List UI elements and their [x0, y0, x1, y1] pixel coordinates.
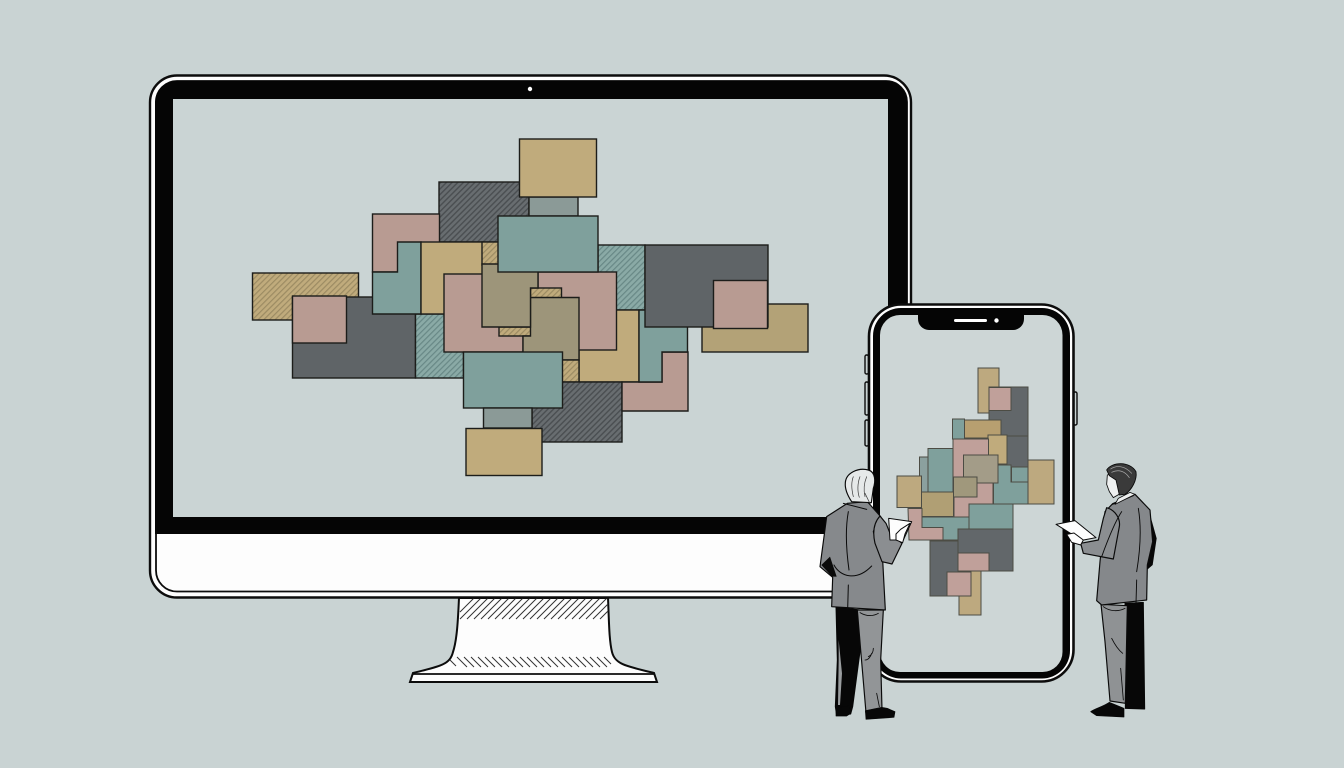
- block: hatched tan left: [252, 273, 358, 320]
- phone block: teal left: [928, 448, 953, 492]
- phone block: teal right small: [1012, 467, 1028, 482]
- right person hair highlights: [1111, 467, 1132, 478]
- left person sleeve: [874, 516, 902, 564]
- phone block: grey left sliver: [920, 457, 930, 492]
- smartphone: [865, 304, 1077, 682]
- phone block: tan top: [978, 368, 999, 413]
- block: hatched tan sliver lower: [499, 327, 531, 336]
- right person jacket seams: [1102, 496, 1140, 603]
- block: hatched dark top: [439, 182, 529, 242]
- phone block: dark top: [989, 387, 1028, 437]
- block: teal L left: [372, 242, 421, 314]
- phone block: teal small: [952, 419, 964, 439]
- camera dot: [528, 87, 532, 91]
- block: hatched tan lower: [562, 360, 579, 382]
- person right, in profile, holding a document: [1056, 464, 1157, 717]
- desktop block diagram: [252, 139, 808, 476]
- left person grey leg: [857, 610, 883, 713]
- block: teal top: [498, 216, 598, 272]
- right person hair: [1107, 464, 1136, 495]
- phone block: teal right L: [994, 465, 1028, 504]
- phone block: dark lower: [958, 529, 1013, 571]
- right person document: [1056, 521, 1096, 540]
- phone block diagram: [897, 368, 1054, 615]
- block: teal L right: [639, 310, 688, 382]
- left person dark leg: [835, 607, 861, 715]
- right person trouser creases: [1103, 607, 1125, 700]
- left person hand: [896, 523, 910, 543]
- right person back shadow: [1145, 508, 1157, 572]
- block: tan far right: [702, 304, 808, 352]
- monitor bezel: [155, 81, 907, 534]
- block: hatched tan small: [482, 242, 499, 265]
- right person grey leg: [1101, 604, 1127, 703]
- monitor stand: [410, 598, 657, 682]
- phone block: pink centre: [953, 439, 988, 478]
- block: hatched tan sliver upper: [530, 288, 562, 298]
- phone block: tan bottom: [959, 571, 981, 615]
- phone block: olive centre: [964, 455, 998, 483]
- block: pink L lower right: [622, 352, 688, 411]
- person left, seen from behind, holding a tablet: [820, 469, 912, 719]
- phone block: dark second: [1007, 436, 1028, 467]
- phone block: orange tan: [964, 420, 1001, 438]
- phone block: tan left second: [922, 492, 954, 516]
- desktop monitor: [150, 76, 911, 598]
- block: tan bottom: [466, 428, 542, 476]
- block: tan centre right: [579, 310, 639, 382]
- left person jacket: [820, 502, 885, 610]
- left person trouser creases: [860, 613, 879, 707]
- block: pink upper left: [372, 214, 440, 272]
- phone screen: [880, 315, 1062, 672]
- block: pink centre right: [538, 272, 616, 350]
- block: pink left: [292, 296, 346, 343]
- left person hair: [845, 469, 875, 503]
- block: olive first: [482, 264, 538, 327]
- phone speaker: [954, 319, 987, 322]
- right person hand: [1067, 533, 1083, 545]
- right person shoe: [1091, 702, 1124, 717]
- phone block: pink lower centre: [954, 483, 993, 517]
- left person leg highlight: [838, 640, 842, 705]
- monitor outer casing: [150, 76, 911, 598]
- block: dark slate right: [645, 245, 768, 327]
- block: pink right: [714, 280, 768, 328]
- phone block: pink lower left: [908, 508, 943, 540]
- phone camera: [994, 318, 999, 323]
- phone block: tan right: [1028, 460, 1054, 504]
- phone notch: [918, 314, 1024, 330]
- block: grey connector top: [529, 197, 578, 216]
- block: hatched teal centre: [598, 245, 645, 310]
- phone bezel: [873, 308, 1070, 678]
- phone block: pink bottom: [947, 572, 971, 596]
- block: tan top: [520, 139, 596, 197]
- phone block: tan left: [897, 476, 922, 508]
- left person jacket seams: [834, 503, 872, 609]
- left person tablet: [889, 518, 912, 540]
- left person shoes: [836, 706, 895, 719]
- monitor screen: [173, 99, 888, 517]
- block: teal centre: [464, 352, 562, 408]
- block: olive second: [523, 298, 579, 360]
- right person sleeve: [1081, 508, 1120, 559]
- block: tan centre left: [421, 242, 483, 314]
- phone block: pink top: [989, 388, 1011, 410]
- right person face: [1107, 472, 1121, 498]
- block: hatched teal left: [416, 314, 464, 378]
- right person collar: [1115, 492, 1135, 504]
- block: hatched dark lower: [532, 382, 622, 442]
- block: pink centre left: [444, 274, 523, 352]
- phone block: pink lower: [958, 553, 989, 571]
- phone block: dark lower left: [930, 541, 958, 596]
- block: dark slate left: [292, 297, 416, 378]
- phone block: olive small: [954, 477, 977, 497]
- phone block: teal lower left: [922, 517, 969, 540]
- left person shadow under arm: [821, 557, 837, 577]
- right person dark leg: [1125, 602, 1145, 709]
- phone side buttons: [865, 355, 1077, 446]
- left person hair strands: [852, 477, 871, 505]
- monitor inner chin line: [156, 81, 907, 592]
- phone block: tan centre: [988, 435, 1007, 464]
- block: grey connector lower: [484, 408, 532, 428]
- right person jacket: [1097, 494, 1153, 605]
- phone casing: [869, 304, 1074, 682]
- phone block: teal lower: [969, 504, 1013, 529]
